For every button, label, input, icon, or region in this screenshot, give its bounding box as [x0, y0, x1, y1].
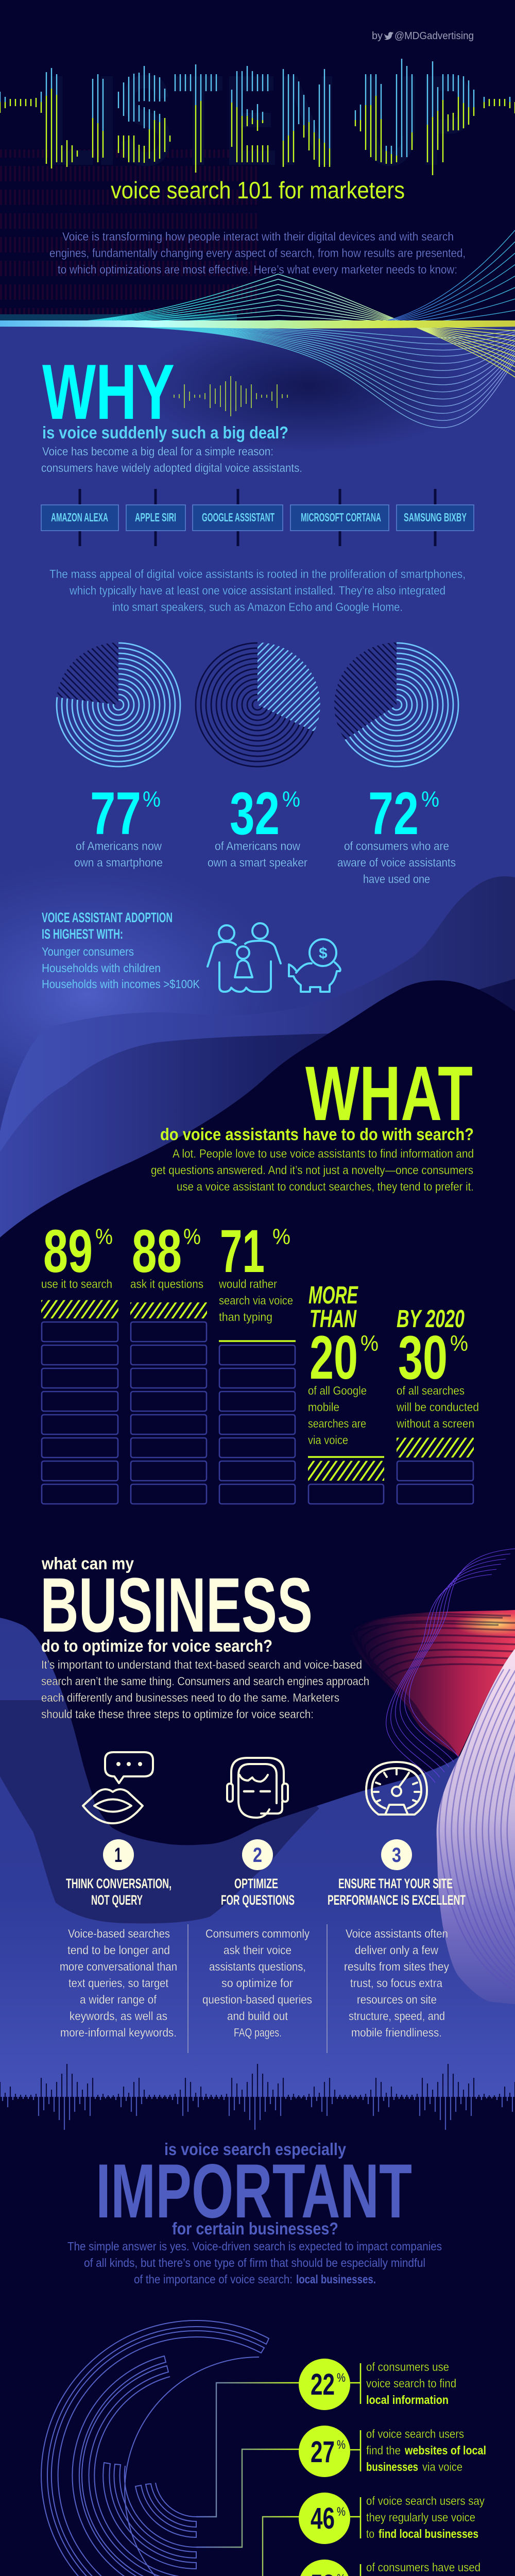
intro text	[49, 230, 466, 276]
text block: mass appeal: into smart speakers, such as Amazon Echo and Google Home.	[112, 600, 403, 614]
subheading: for certain businesses: for certain businesses?	[172, 2219, 338, 2238]
assistants row: APPLE SIRI	[135, 511, 176, 524]
byline: by	[372, 30, 383, 42]
step 3: trust, so focus extra	[350, 1976, 442, 1990]
stat: 27	[299, 2426, 486, 2477]
stat: 89: 89	[43, 1217, 93, 1285]
stat: 27: 27	[311, 2435, 335, 2469]
step 3: results from sites they	[344, 1960, 449, 1973]
panel: important	[0, 2140, 515, 2576]
waveform divider	[0, 2064, 515, 2130]
assistants row: GOOGLE ASSISTANT	[202, 511, 274, 524]
stat: 46: they regularly use voice	[366, 2511, 475, 2524]
stat: 27: via voice	[422, 2460, 462, 2473]
panel: adoption	[42, 910, 340, 992]
text block: mass appeal: which typically have at least one voice assistant installed. They’re also integrated	[69, 584, 445, 597]
text block: why intro: consumers have widely adopted digital voice assistants.	[41, 461, 302, 474]
stat: 46: 46	[311, 2502, 335, 2535]
stat captions: what: use it to search	[41, 1277, 112, 1291]
stat captions: what: than typing	[219, 1310, 272, 1324]
step 2	[202, 1839, 312, 2039]
step 3	[328, 1839, 466, 2039]
stat captions: own a smartphone	[74, 856, 163, 869]
stat captions	[74, 839, 456, 886]
text block: mass appeal	[49, 567, 466, 614]
stat: more than 20%: 20	[310, 1323, 358, 1392]
stat: by 2020 30%: without a screen	[396, 1417, 474, 1430]
stat: 58: of consumers have used	[366, 2561, 480, 2574]
stat: 46: find local businesses	[379, 2527, 478, 2540]
stat: 27: %	[337, 2438, 346, 2452]
pie chart: 72%	[334, 642, 458, 767]
icon: headset face	[227, 1758, 288, 1818]
step 1: THINK CONVERSATION,	[66, 1876, 171, 1891]
stat: 22	[299, 2359, 456, 2410]
panel: what	[41, 1050, 479, 1504]
text block: important intro: of all kinds, but there’s one type of firm that should be especially mindful	[84, 2256, 425, 2269]
text block: business intro: should take these three steps to optimize for voice search:	[41, 1707, 314, 1721]
stat: by 2020 30%: of all searches	[397, 1384, 465, 1397]
step 2: FAQ pages.	[234, 2026, 282, 2039]
stat: by 2020 30%: %	[450, 1331, 468, 1356]
step 1: 1	[114, 1844, 122, 1867]
subheading: why: is voice suddenly such a big deal?	[42, 423, 288, 442]
icon: family	[208, 923, 281, 992]
stat captions: of Americans now	[215, 839, 300, 853]
step 2: question-based queries	[202, 1993, 312, 2006]
icon: small waveform	[174, 376, 287, 416]
text block: adoption list: Younger consumers	[42, 945, 134, 958]
text block: mass appeal: The mass appeal of digital voice assistants is rooted in the proliferation of smartphones,	[49, 567, 466, 581]
text block: important intro: The simple answer is yes. Voice-driven search is expected to impact companies	[67, 2240, 442, 2253]
step 1: keywords, as well as	[70, 2009, 167, 2023]
text block: adoption list	[42, 945, 200, 991]
stat: 32: %	[282, 787, 300, 812]
stat: 22: local information	[366, 2393, 449, 2406]
subheading: is voice search especially: is voice search especially	[164, 2140, 347, 2159]
subheading: business: do to optimize for voice search?	[41, 1636, 272, 1655]
pie chart: 77%	[57, 642, 180, 767]
stat captions: own a smart speaker	[208, 856, 307, 869]
stat: 22: of consumers use	[366, 2360, 449, 2374]
heading: why: WHY	[42, 348, 175, 436]
assistants row: AMAZON ALEXA	[51, 511, 108, 524]
stat: more than 20%: THAN	[310, 1306, 357, 1333]
stat: more than 20%: %	[360, 1331, 379, 1356]
stat: 27: businesses	[366, 2460, 418, 2473]
text block: adoption list: Households with children	[42, 961, 161, 975]
stat: 58	[299, 2560, 482, 2576]
stat: 27: of voice search users	[366, 2427, 464, 2441]
chart: concentric arcs	[41, 2320, 269, 2576]
text block: important intro: of the importance of voice search:	[134, 2273, 293, 2286]
step 1: text queries, so target	[68, 1976, 169, 1990]
stat: 27: websites of local	[404, 2444, 486, 2457]
assistants row: MICROSOFT CORTANA	[301, 511, 381, 524]
heading: adoption	[42, 910, 173, 942]
stat: 77: %	[143, 787, 161, 812]
step 2: and build out	[227, 2009, 288, 2023]
icon: lips and speech bubble	[83, 1752, 153, 1823]
decorative background shapes	[0, 860, 515, 1649]
stat: 72: %	[421, 787, 439, 812]
panel: why	[41, 348, 474, 614]
stat: more than 20%: mobile	[308, 1400, 339, 1414]
text block: what intro: get questions answered. And it’s not just a novelty—once consumers	[151, 1163, 473, 1177]
step 3: deliver only a few	[355, 1943, 438, 1957]
text block: what intro	[151, 1147, 474, 1193]
stat: 22: %	[337, 2371, 346, 2385]
stat captions: what: ask it questions	[130, 1277, 203, 1291]
stat captions: of consumers who are	[344, 839, 449, 853]
stat: 46: of voice search users say	[366, 2494, 485, 2507]
step 3: mobile friendliness.	[351, 2026, 442, 2039]
pie chart: 32%	[196, 642, 320, 767]
stat: more than 20%	[308, 1282, 379, 1447]
heading: business: BUSINESS	[40, 1562, 313, 1648]
stat: 46: %	[337, 2505, 346, 2519]
text block: why intro	[41, 445, 302, 474]
assistants row: SAMSUNG BIXBY	[404, 511, 467, 524]
stat: by 2020 30%	[396, 1306, 479, 1430]
stat: 72: 72	[368, 779, 419, 847]
text block: what intro: use a voice assistant to conduct searches, they tend to prefer it.	[177, 1180, 474, 1193]
step 3: ENSURE THAT YOUR SITE	[338, 1876, 453, 1891]
connectors	[196, 2383, 299, 2576]
stat: 46	[299, 2493, 485, 2544]
step 2: assistants questions,	[209, 1960, 306, 1973]
stat: 22: 22	[311, 2368, 335, 2401]
step 2: 2	[253, 1844, 262, 1867]
stat captions: what: would rather	[218, 1277, 277, 1291]
icon: speed gauge	[366, 1762, 427, 1815]
text block: business intro: each differently and businesses need to do the same. Marketers	[41, 1691, 339, 1704]
stat: 89: %	[95, 1225, 113, 1249]
heading: adoption: VOICE ASSISTANT ADOPTION	[42, 910, 173, 925]
stat captions: of Americans now	[76, 839, 162, 853]
heading: adoption: IS HIGHEST WITH:	[42, 926, 123, 942]
subheading: what: do voice assistants have to do with search?	[160, 1125, 474, 1144]
text block: business intro: It’s important to understand that text-based search and voice-based	[41, 1658, 362, 1671]
text block: business intro	[41, 1658, 369, 1721]
business section background	[0, 1546, 515, 2097]
intro text: engines, fundamentally changing every aspect of search, from how results are presented,	[49, 246, 466, 260]
stat: 71: %	[272, 1225, 290, 1249]
stat captions: what: search via voice	[219, 1294, 293, 1307]
panel: business	[40, 1554, 466, 2053]
stat: 88: 88	[132, 1217, 182, 1285]
step 3: Voice assistants often	[346, 1927, 448, 1940]
wave ribbon background between hero and why section	[0, 230, 515, 1290]
byline: @MDGadvertising	[394, 30, 474, 42]
assistants row	[41, 489, 474, 546]
stat: 22: voice search to find	[366, 2377, 456, 2390]
intro text: to which optimizations are most effective. Here’s what every marketer needs to know:	[58, 263, 457, 276]
subtitle: voice search 101 for marketers	[111, 177, 405, 204]
step 3: 3	[392, 1844, 401, 1867]
heading: what can my: what can my	[41, 1554, 134, 1573]
step 2: OPTIMIZE	[234, 1876, 278, 1891]
step 2: so optimize for	[221, 1976, 293, 1990]
text block: business intro: search aren’t the same thing. Consumers and search engines approach	[41, 1674, 369, 1688]
step 1: NOT QUERY	[91, 1892, 143, 1908]
stat: 27: find the	[366, 2444, 401, 2457]
step 1: a wider range of	[80, 1993, 157, 2006]
step 2: FOR QUESTIONS	[221, 1892, 295, 1908]
stat: by 2020 30%: BY 2020	[397, 1306, 465, 1333]
step 3: structure, speed, and	[349, 2009, 445, 2023]
stat: more than 20%: searches are	[308, 1417, 366, 1430]
intro text: Voice is transforming how people interact with their digital devices and with search	[62, 230, 454, 243]
step 3: resources on site	[357, 1993, 437, 2006]
text block: what intro: A lot. People love to use voice assistants to find information and	[173, 1147, 474, 1160]
stat: 71: 71	[220, 1217, 265, 1285]
icon: piggy bank	[289, 939, 340, 992]
step 2: Consumers commonly	[205, 1927, 310, 1940]
stat: more than 20%: of all Google	[308, 1384, 367, 1397]
step 1: Voice-based searches	[68, 1927, 170, 1940]
stat: 88: %	[183, 1225, 201, 1249]
step 1: more-informal keywords.	[60, 2026, 177, 2039]
stat: 32: 32	[230, 779, 280, 847]
stat captions: what	[41, 1277, 293, 1324]
step 1: tend to be longer and	[67, 1943, 170, 1957]
stat: by 2020 30%: 30	[398, 1323, 448, 1392]
stat captions: aware of voice assistants	[337, 856, 456, 869]
stat: by 2020 30%: will be conducted	[396, 1400, 479, 1414]
step 2: ask their voice	[224, 1943, 291, 1957]
text block: why intro: Voice has become a big deal for a simple reason:	[42, 445, 273, 458]
step 1	[60, 1839, 177, 2039]
text block: adoption list: Households with incomes >$100K	[42, 977, 200, 991]
stat: more than 20%: via voice	[308, 1433, 348, 1447]
stat: 46: to	[366, 2527, 374, 2540]
stat: 77: 77	[90, 779, 141, 847]
text block: important intro: local businesses.	[296, 2273, 376, 2286]
stat captions: have used one	[363, 872, 430, 886]
text block: important intro	[67, 2240, 442, 2286]
icon: piggy bank: $	[319, 945, 328, 962]
chart: stacked rows	[41, 1300, 474, 1504]
stat: more than 20%: MORE	[308, 1282, 358, 1309]
step 1: more conversational than	[60, 1960, 177, 1973]
